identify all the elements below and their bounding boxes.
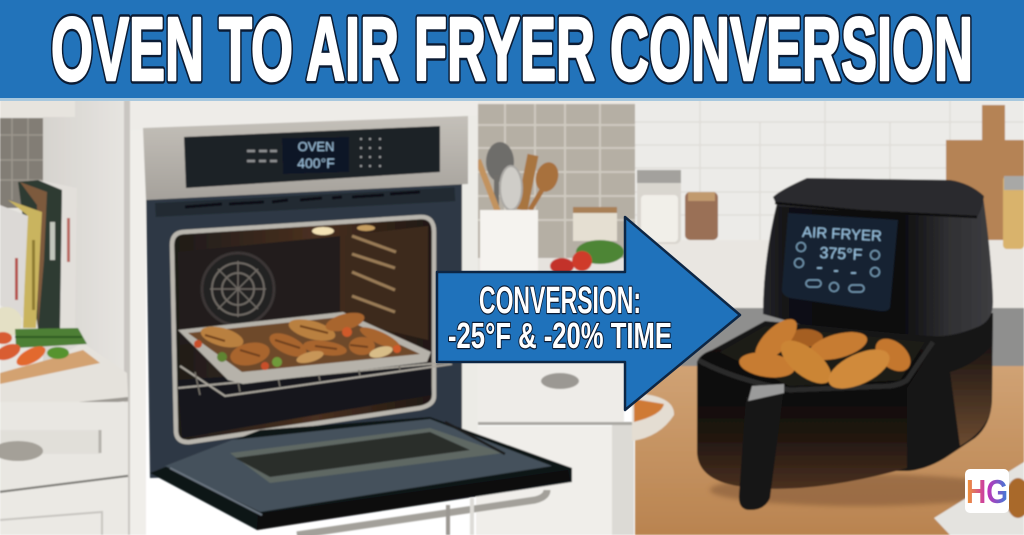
counter with cutting board and vegetables xyxy=(0,307,128,414)
panel: wall oven xyxy=(130,100,572,535)
header banner xyxy=(0,0,1024,101)
oven door handle xyxy=(297,490,547,535)
panel: right kitchen background xyxy=(632,100,1024,535)
air fryer basket xyxy=(697,321,935,489)
panel: left kitchen niche xyxy=(0,100,146,535)
panel: center backsplash and crock xyxy=(470,100,636,535)
arrow callout: conversion rule xyxy=(437,217,740,410)
air fryer upper body xyxy=(763,196,993,336)
jar xyxy=(573,209,617,241)
cutting board xyxy=(946,105,1024,249)
oven cavity xyxy=(172,217,434,442)
oven display: OVEN xyxy=(298,139,334,154)
air fryer handle xyxy=(739,384,784,510)
oven display xyxy=(282,137,349,174)
callout values: -25°F & -20% TIME xyxy=(448,315,672,356)
baking tray with chicken xyxy=(178,309,431,384)
panel: air fryer xyxy=(697,178,1010,510)
air fryer lower body xyxy=(820,313,993,471)
crock xyxy=(480,210,538,272)
convection fan xyxy=(202,253,274,325)
small bowl xyxy=(632,393,674,441)
tomatoes and greens xyxy=(576,240,624,264)
control panel xyxy=(143,116,468,200)
plate with food xyxy=(934,462,1024,535)
air fryer touch display: AIR FRYER xyxy=(802,224,882,245)
air fryer lid xyxy=(773,178,984,217)
oven body xyxy=(146,178,462,478)
open oven door xyxy=(150,417,572,530)
oven display: 400°F xyxy=(297,155,335,171)
callout heading: CONVERSION: xyxy=(479,280,641,322)
oven rack xyxy=(178,347,452,396)
lower left drawers xyxy=(0,402,128,535)
logo badge: HG xyxy=(966,473,1008,510)
utensils xyxy=(478,142,562,212)
air fryer shadow xyxy=(710,474,1010,506)
cookbooks xyxy=(0,180,77,329)
middle drawers xyxy=(476,363,624,423)
air fryer touch display xyxy=(782,213,898,311)
glass jars xyxy=(637,170,718,244)
fried chicken wings xyxy=(738,312,917,397)
air fryer touch display: 375°F xyxy=(819,245,863,264)
